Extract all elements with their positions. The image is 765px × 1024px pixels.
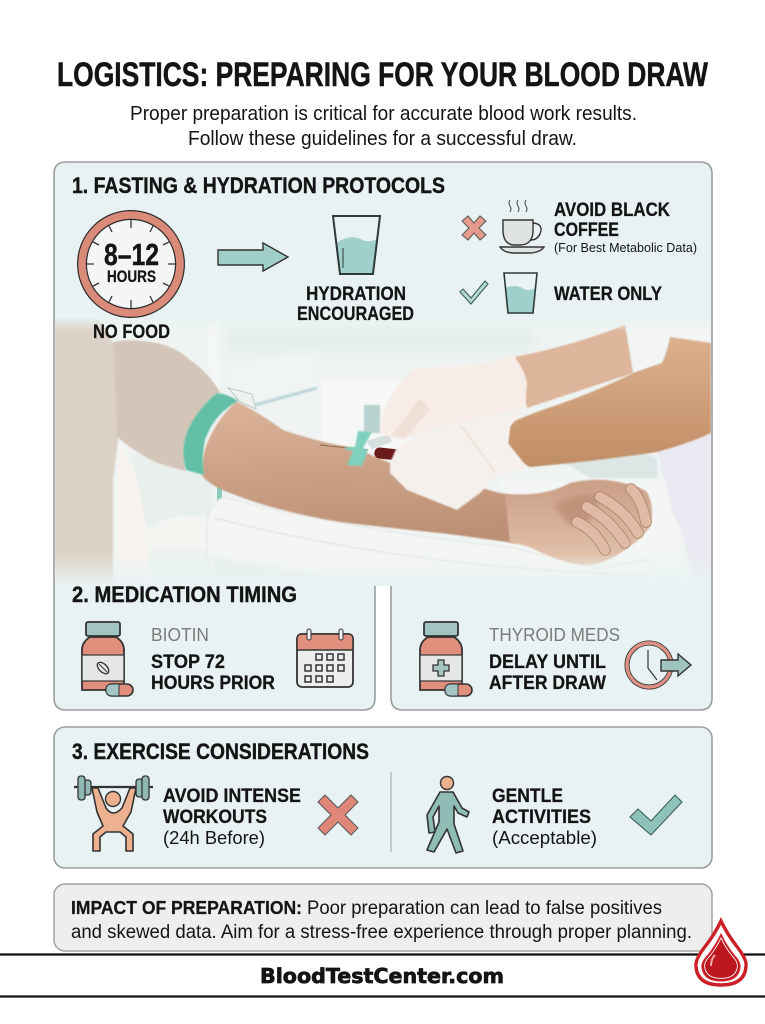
text: biotin (151, 624, 275, 694)
subtitle: Follow these guidelines for a successful draw. (188, 127, 577, 150)
subtitle: Proper preparation is critical for accurate blood work results. (130, 102, 637, 125)
label: hydration encouraged: ENCOURAGED (297, 303, 414, 325)
text: avoid black coffee (554, 199, 697, 255)
icon: red x (462, 216, 486, 240)
icon: coffee cup (500, 200, 544, 253)
arrow: fasting to hydration (218, 243, 288, 271)
text: gentle activities: GENTLE (492, 785, 563, 807)
text: avoid intense workouts: WORKOUTS (163, 806, 267, 828)
text: gentle activities: ACTIVITIES (492, 806, 591, 828)
photo edge fades (55, 318, 708, 330)
text: gentle activities (492, 785, 597, 848)
label: hydration encouraged: HYDRATION (306, 283, 406, 305)
callout: impact of preparation: IMPACT OF PREPARATION: (71, 897, 302, 918)
text: thyroid meds: THYROID MEDS (489, 624, 620, 645)
subtitle (130, 102, 637, 150)
icon: large check (630, 795, 682, 835)
text: avoid intense workouts: AVOID INTENSE (163, 785, 301, 807)
text: avoid black coffee: AVOID BLACK (554, 199, 670, 221)
text: biotin: STOP 72 (151, 651, 225, 673)
tourniquet tube (211, 478, 222, 575)
icon: check mark (460, 281, 488, 304)
icon: calendar (297, 629, 353, 687)
text: avoid black coffee: (For Best Metabolic Data) (554, 240, 697, 255)
text: avoid intense workouts: (24h Before) (163, 827, 265, 848)
patient arm (202, 401, 652, 565)
text: biotin: BIOTIN (151, 624, 209, 645)
label: hydration encouraged (297, 283, 414, 325)
label: no food: NO FOOD (93, 321, 170, 343)
icon: small water glass (504, 273, 537, 313)
callout: impact of preparation: Poor preparation can lead to false positives (307, 898, 662, 919)
icon: water glass (333, 216, 380, 274)
tourniquet band (183, 393, 238, 475)
butterfly needle (320, 430, 397, 467)
icon: blood drop logo (696, 921, 746, 985)
icon: thyroid bottle (420, 622, 472, 696)
icon: fasting clock: 8–12 (104, 237, 159, 272)
text: avoid black coffee: COFFEE (554, 219, 619, 241)
text: gentle activities: (Acceptable) (492, 827, 597, 848)
heading: section 3: 3. EXERCISE CONSIDERATIONS (72, 739, 369, 764)
gloved hands (380, 355, 527, 510)
icon: fasting clock: HOURS (107, 268, 156, 286)
text: thyroid meds: DELAY UNTIL (489, 651, 606, 673)
heading: section 2: 2. MEDICATION TIMING (72, 582, 297, 607)
sweater (55, 318, 220, 586)
icon: clock with arrow (627, 643, 691, 687)
icon: weightlifter (74, 776, 153, 851)
text: thyroid meds (489, 624, 620, 694)
icon: fasting clock (82, 215, 180, 313)
icon: large red x (318, 795, 358, 835)
callout: impact of preparation (54, 884, 712, 951)
panel: fasting and hydration with photo and medication timing backdrop (54, 162, 712, 710)
callout: impact of preparation: and skewed data. Aim for a stress-free experience through proper planning. (71, 922, 692, 943)
footer: site name: BloodTestCenter.com (260, 964, 504, 988)
text: water only: WATER ONLY (554, 283, 662, 305)
text: biotin: HOURS PRIOR (151, 672, 275, 694)
armrest (208, 496, 540, 575)
photo: blood draw from arm (55, 316, 711, 590)
text: thyroid meds: AFTER DRAW (489, 672, 607, 694)
icon: biotin bottle (82, 622, 133, 696)
text: avoid intense workouts (163, 785, 301, 848)
heading: section 1: 1. FASTING & HYDRATION PROTOCOLS (72, 173, 445, 198)
icon: walking person (427, 776, 469, 853)
nurse arms and coat (508, 324, 711, 561)
panel: exercise considerations (54, 727, 712, 868)
